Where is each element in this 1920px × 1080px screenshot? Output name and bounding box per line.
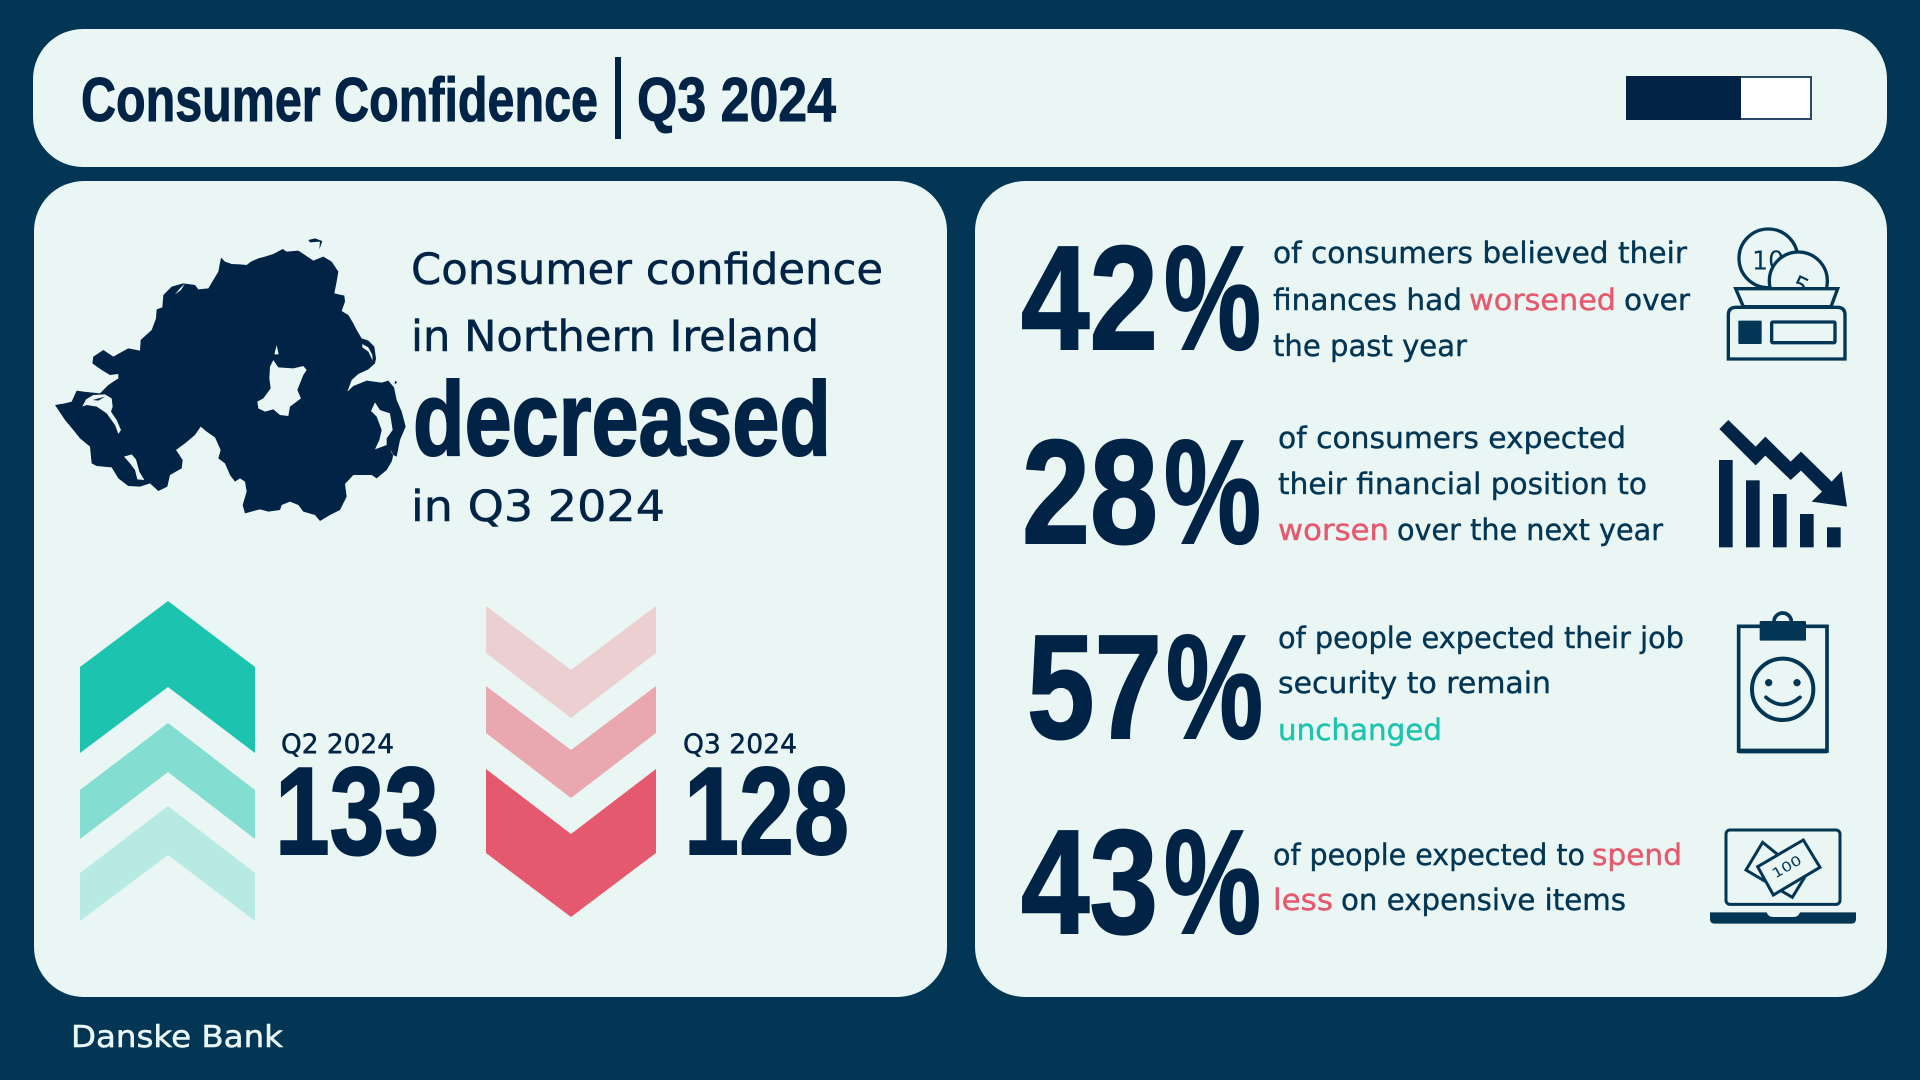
stat: 43% (1021, 800, 1261, 965)
icon: clipboard with smile (1739, 613, 1827, 751)
icon: coins on till (1728, 229, 1845, 359)
headline text (411, 245, 883, 532)
headline text: in Northern Ireland (411, 312, 819, 362)
icon: coins on till: 10 (1752, 245, 1784, 275)
stat text: finances worsened: the past year (1273, 329, 1467, 363)
stat text: expected to worsen: of consumers expected (1278, 421, 1626, 455)
stat text: spend less: spend (1592, 838, 1682, 872)
icon: laptop with banknotes: 100 (1770, 853, 1805, 882)
stat text: job security: security to remain (1278, 666, 1551, 700)
stat text: job security: of people expected their job (1278, 621, 1684, 655)
stat text: finances worsened: over (1624, 283, 1690, 317)
stat: 42% (1021, 216, 1261, 381)
stat text: spend less: of people expected to (1273, 838, 1585, 872)
Q2 value: Q2 2024 (281, 729, 394, 760)
stat text: finances worsened: worsened (1469, 283, 1616, 317)
chevrons down: Q3 (486, 606, 656, 917)
stat text: expected to worsen: worsen (1278, 513, 1389, 547)
stat text: finances worsened: finances had (1273, 283, 1462, 317)
panel: right statistics (975, 181, 1887, 997)
stat text: expected to worsen (1278, 421, 1663, 547)
headline text: in Q3 2024 (411, 482, 665, 532)
stat text: finances worsened: of consumers believed their (1273, 236, 1687, 270)
logo: Danske Bank: Danske Bank (71, 1020, 284, 1055)
Q3 value: 128 (684, 743, 849, 881)
stat text: finances worsened (1273, 236, 1690, 363)
panel: left consumer confidence (34, 181, 947, 997)
stat: 42%: 42 (1021, 216, 1158, 381)
Q3 value: Q3 2024 (683, 729, 797, 760)
header panel (33, 29, 1887, 167)
map: Northern Ireland (55, 238, 406, 521)
stat: 43%: 43 (1021, 800, 1158, 965)
stat text: job security (1278, 621, 1684, 747)
headline text: decreased (413, 361, 831, 478)
stat text: spend less: less (1273, 883, 1333, 917)
stat text: spend less: on expensive items (1341, 883, 1626, 917)
stat: 57%: 57 (1027, 605, 1162, 770)
Q2 value: 133 (275, 743, 439, 881)
stat text: expected to worsen: their financial position to (1278, 467, 1647, 501)
stat text: expected to worsen: over the next year (1397, 513, 1663, 547)
stat: 28% (1022, 410, 1261, 575)
stat: 57%: % (1166, 605, 1263, 770)
period label: Q3 2024 (637, 66, 836, 135)
stat: 42%: % (1164, 216, 1261, 381)
stat text: job security: unchanged (1278, 713, 1442, 747)
icon: laptop with banknotes (1710, 830, 1856, 924)
progress bar (1626, 76, 1811, 120)
stat: 57% (1027, 605, 1263, 770)
stat: 28%: % (1164, 410, 1261, 575)
stat: 28%: 28 (1022, 410, 1158, 575)
title: Consumer Confidence (81, 66, 598, 135)
icon: coins on till: 5 (1787, 269, 1814, 303)
headline text: Consumer confidence (411, 245, 883, 295)
stat: 43%: % (1164, 800, 1261, 965)
stat text: spend less (1273, 838, 1682, 917)
icon: falling chart (1719, 420, 1847, 547)
chevrons up: Q2 (80, 601, 255, 921)
